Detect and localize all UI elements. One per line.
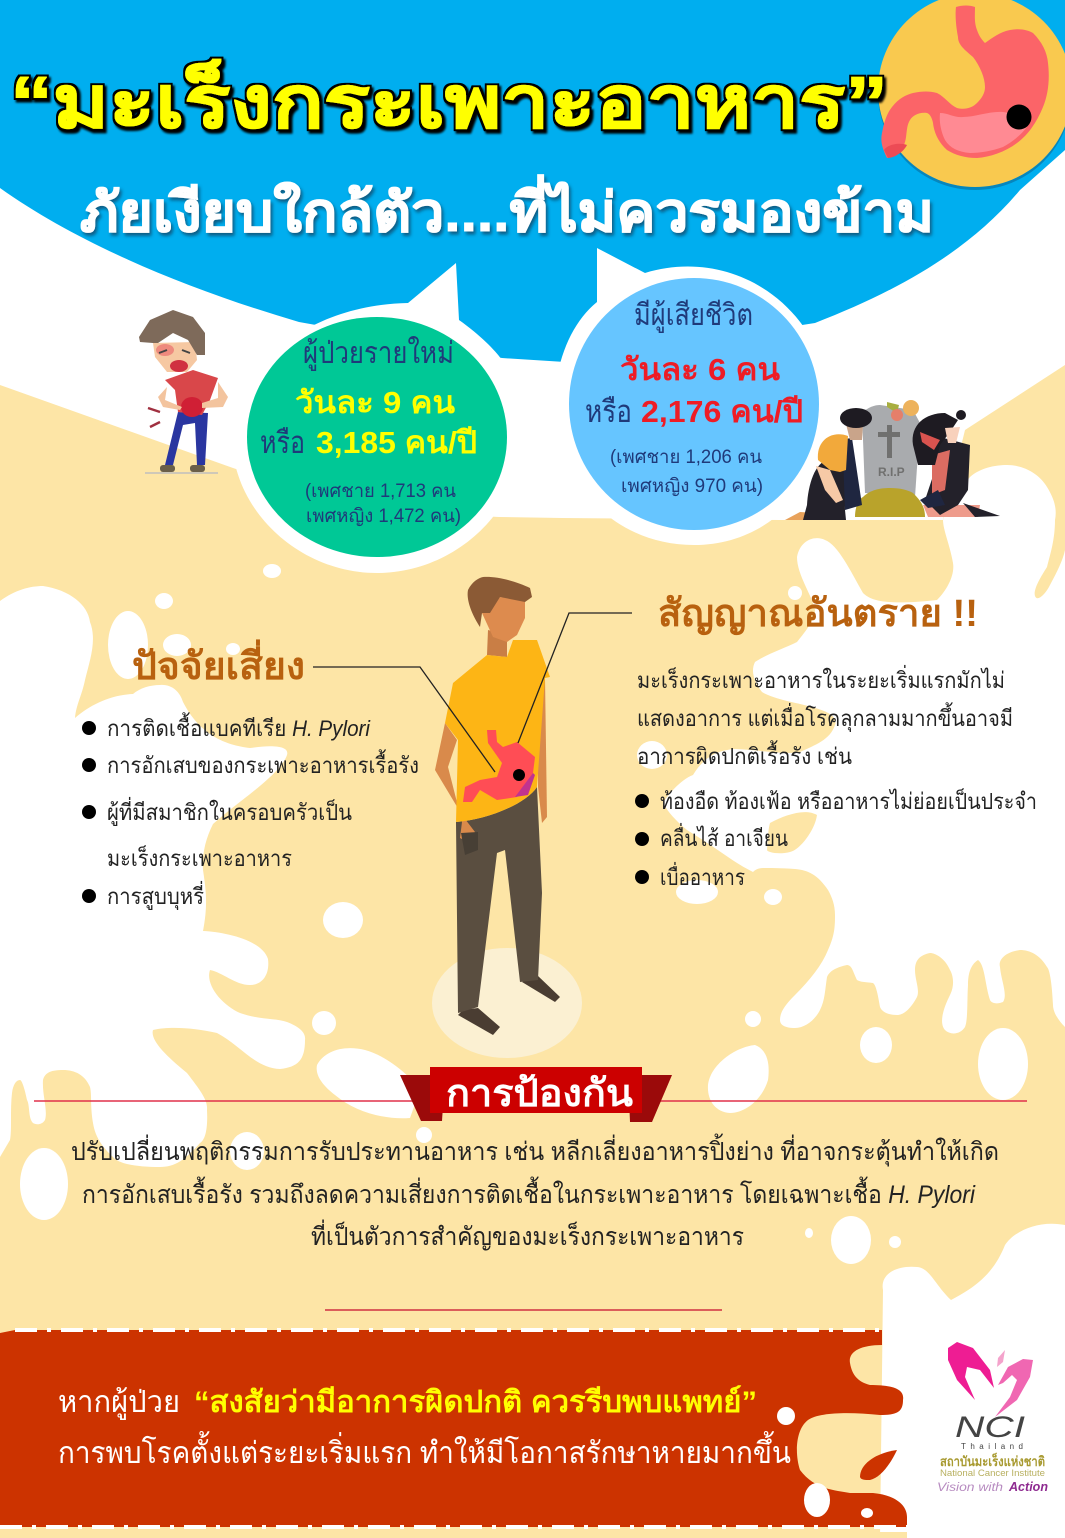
panel: deaths bubble: หรือ xyxy=(585,394,632,429)
list: risk factors: ผู้ที่มีสมาชิกในครอบครัวเป็น xyxy=(107,796,352,826)
panel: deaths bubble xyxy=(554,248,829,545)
list: warning signs xyxy=(635,787,1037,890)
figure: standing man with stomach xyxy=(432,577,582,1058)
list: risk factors xyxy=(82,712,419,910)
text: warning signs intro: แสดงอาการ แต่เมื่อโรคลุกลามมากขึ้นอาจมี xyxy=(637,702,1013,732)
icon: stomach with tumour xyxy=(878,0,1065,190)
panel: new patients bubble: 3,185 คน/ปี xyxy=(316,425,477,460)
panel: deaths bubble: (เพศชาย 1,206 คน xyxy=(610,447,762,468)
panel: new patients bubble xyxy=(232,263,522,573)
icon: man with stomach ache xyxy=(139,310,228,474)
list: risk factors: การสูบบุหรี่ xyxy=(107,880,204,910)
panel: deaths bubble: เพศหญิง 970 คน) xyxy=(621,476,763,497)
logo: National Cancer Institute xyxy=(937,1342,1048,1494)
panel: call to action band: หากผู้ป่วย xyxy=(58,1386,180,1420)
logo: National Cancer Institute: Thailand xyxy=(961,1442,1023,1451)
subtitle: ภัยเงียบใกล้ตัว....ที่ไม่ควรมองข้าม xyxy=(80,174,934,243)
logo: National Cancer Institute: Action xyxy=(1008,1479,1048,1494)
panel: new patients bubble: ผู้ป่วยรายใหม่ xyxy=(303,336,454,371)
panel: call to action band xyxy=(0,1330,907,1527)
text: warning signs intro xyxy=(637,664,1013,769)
panel: new patients bubble: (เพศชาย 1,713 คน xyxy=(305,481,456,502)
list: risk factors: การติดเชื้อแบคทีเรีย H. Pylori xyxy=(107,712,371,741)
logo: National Cancer Institute: National Cancer Institute xyxy=(940,1468,1045,1479)
icon: mourners at gravestone xyxy=(785,400,1000,520)
text: prevention advice xyxy=(71,1133,999,1251)
header: blue banner xyxy=(0,0,1065,362)
panel: deaths bubble: 2,176 คน/ปี xyxy=(641,394,803,429)
panel: call to action band: การพบโรคตั้งแต่ระยะเริ่มแรก ทำให้มีโอกาสรักษาหายมากขึ้น xyxy=(58,1431,791,1470)
logo: National Cancer Institute: NCI xyxy=(955,1411,1025,1444)
list: warning signs: คลื่นไส้ อาเจียน xyxy=(660,822,788,851)
list: risk factors: มะเร็งกระเพาะอาหาร xyxy=(107,844,292,871)
text: prevention advice: การอักเสบเรื้อรัง รวมถึงลดความเสี่ยงการติดเชื้อในกระเพาะอาหาร โดยเฉพาะเชื้อ H. Pylori xyxy=(82,1176,976,1209)
panel: new patients bubble: วันละ 9 คน xyxy=(295,385,455,420)
heading ribbon: prevention xyxy=(400,1067,672,1122)
leader line: risk factors xyxy=(313,667,495,772)
heading ribbon: prevention: การป้องกัน xyxy=(446,1073,633,1115)
panel: new patients bubble: หรือ xyxy=(260,425,305,460)
text: warning signs intro: มะเร็งกระเพาะอาหารในระยะเริ่มแรกมักไม่ xyxy=(637,664,1005,693)
logo: National Cancer Institute: Vision with xyxy=(937,1480,1003,1494)
heading: risk factors: ปัจจัยเสี่ยง xyxy=(132,639,305,688)
heading: warning signs: สัญญาณอันตราย !! xyxy=(658,593,978,635)
title: “มะเร็งกระเพาะอาหาร” xyxy=(10,59,888,143)
text: prevention advice: ปรับเปลี่ยนพฤติกรรมการรับประทานอาหาร เช่น หลีกเลี่ยงอาหารปิ้งย่าง ที่อาจกระตุ้นทำให้เกิด xyxy=(71,1133,999,1167)
panel: deaths bubble: วันละ 6 คน xyxy=(620,352,780,387)
panel: call to action band: “สงสัยว่ามีอาการผิดปกติ ควรรีบพบแพทย์” xyxy=(194,1385,757,1419)
panel: new patients bubble: เพศหญิง 1,472 คน) xyxy=(306,506,461,527)
text: prevention advice: ที่เป็นตัวการสำคัญของมะเร็งกระเพาะอาหาร xyxy=(311,1219,744,1251)
logo: National Cancer Institute: สถาบันมะเร็งแห่งชาติ xyxy=(940,1452,1045,1469)
list: risk factors: การอักเสบของกระเพาะอาหารเรื้อรัง xyxy=(107,749,419,778)
text: warning signs intro: อาการผิดปกติเรื้อรัง เช่น xyxy=(637,740,852,769)
leader line: warning signs xyxy=(518,613,632,743)
icon: mourners at gravestone: R.I.P xyxy=(878,465,905,479)
list: warning signs: เบื่ออาหาร xyxy=(660,861,745,890)
panel: deaths bubble: มีผู้เสียชีวิต xyxy=(634,299,753,333)
